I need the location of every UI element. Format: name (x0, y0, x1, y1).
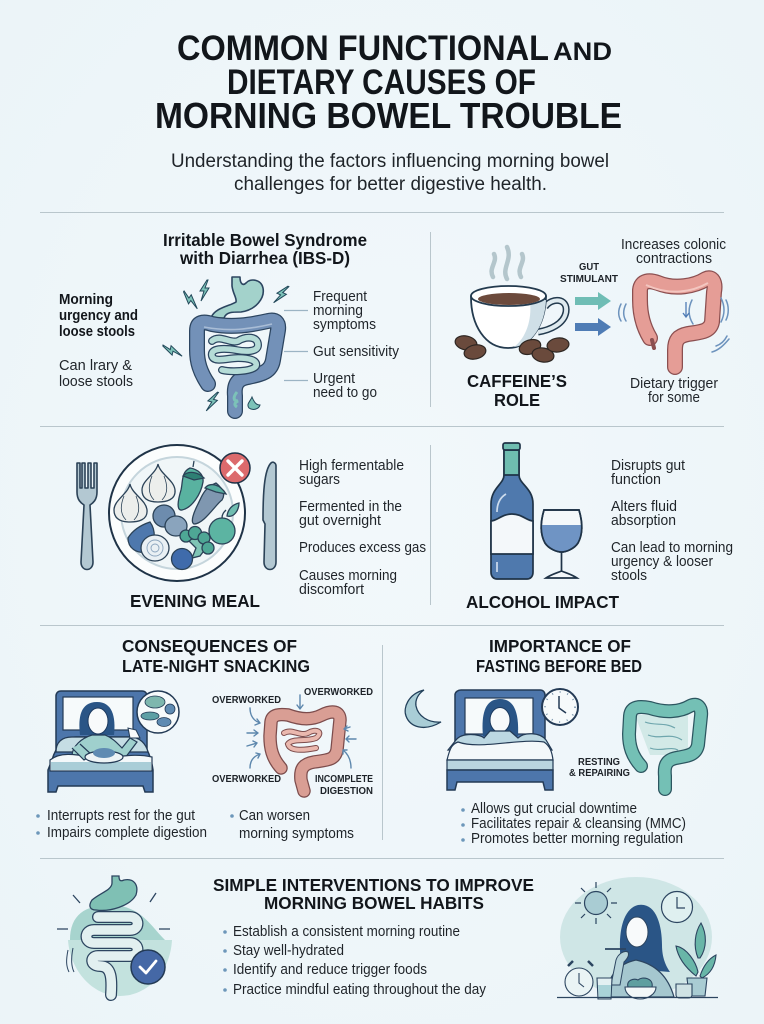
text: morning urgency (59, 292, 138, 390)
text: morning urgency: Morning (59, 292, 113, 308)
icon: snack bubble (137, 691, 179, 733)
text: morning urgency: loose stools (59, 374, 133, 390)
arrow: teal (575, 292, 611, 310)
text: IBS symptoms: Gut sensitivity (313, 344, 400, 360)
text: evening meal points: Fermented in the (299, 499, 402, 515)
heading: alcohol impact: ALCOHOL IMPACT (466, 592, 619, 612)
label: resting and repairing (569, 756, 630, 779)
text: evening meal points: High fermentable (299, 458, 404, 474)
icon: resting colon (629, 705, 701, 789)
subtitle: Understanding the factors influencing morning bowel (171, 151, 609, 172)
labels: overworked: OVERWORKED (304, 686, 373, 698)
labels: overworked: OVERWORKED (212, 694, 281, 706)
text: IBS symptoms: Urgent (313, 371, 355, 387)
heading: IBS-D: Irritable Bowel Syndrome (163, 230, 367, 250)
text: increases contractions (621, 237, 726, 267)
heading: fasting before bed: IMPORTANCE OF (489, 636, 631, 656)
text: intervention bullets: Identify and reduce trigger foods (233, 962, 427, 978)
label: resting and repairing: RESTING (578, 756, 620, 768)
text: fasting bullets: Facilitates repair & cleansing (MMC) (471, 816, 686, 832)
heading: simple interventions: MORNING BOWEL HABITS (264, 893, 484, 913)
text: intervention bullets: Establish a consistent morning routine (233, 924, 460, 940)
text: alcohol points (611, 458, 733, 584)
text: alcohol points: Alters fluid (611, 499, 677, 515)
text: snacking bullets: morning symptoms (239, 826, 354, 842)
labels: overworked: INCOMPLETE (315, 773, 373, 785)
icon: moon (405, 690, 441, 727)
icon: overworked colon (270, 712, 340, 791)
heading: simple interventions (213, 875, 534, 913)
title (155, 29, 622, 136)
panel: simple interventions (57, 875, 718, 999)
label: resting and repairing: & REPAIRING (569, 767, 630, 779)
panel: fasting before bed (405, 636, 701, 847)
text: snacking bullets: Impairs complete digestion (47, 825, 207, 841)
panel: alcohol (466, 443, 733, 612)
text: intervention bullets: Practice mindful eating throughout the day (233, 982, 487, 998)
text: snacking bullets (36, 808, 354, 842)
text: snacking bullets: Interrupts rest for the gut (47, 808, 195, 824)
text: IBS symptoms: symptoms (313, 317, 376, 333)
text: snacking bullets: Can worsen (239, 808, 310, 824)
text: alcohol points: Disrupts gut (611, 458, 685, 474)
subtitle (171, 151, 609, 195)
title: AND (553, 38, 612, 66)
title: MORNING BOWEL TROUBLE (155, 95, 622, 136)
text: IBS symptoms: morning (313, 303, 363, 319)
icon: knife (263, 462, 276, 570)
text: increases contractions: contractions (636, 251, 712, 267)
labels: overworked: DIGESTION (320, 785, 373, 797)
labels: overworked (212, 686, 373, 797)
heading: simple interventions: SIMPLE INTERVENTIONS TO IMPROVE (213, 875, 534, 895)
text: evening meal points: Produces excess gas (299, 540, 426, 556)
heading: fasting before bed (476, 636, 642, 676)
text: intervention bullets: Stay well-hydrated (233, 943, 344, 959)
icon: red x badge (220, 453, 250, 483)
text: gut stimulant (560, 261, 619, 285)
icon: clock (542, 689, 578, 725)
icon: fork (77, 463, 97, 570)
text: morning urgency: urgency and (59, 308, 138, 324)
panel: evening meal (77, 445, 426, 611)
text: fasting bullets: Allows gut crucial downtime (471, 801, 637, 817)
subtitle: challenges for better digestive health. (234, 174, 547, 195)
text: dietary trigger: Dietary trigger (630, 376, 718, 392)
arrow: blue (575, 318, 611, 336)
text: alcohol points: Can lead to morning (611, 540, 733, 556)
text: gut stimulant: STIMULANT (560, 273, 619, 285)
heading: late-night snacking (122, 636, 310, 676)
text: IBS symptoms (284, 289, 400, 401)
text: morning urgency: Can lrary & (59, 358, 132, 374)
icon: coffee cup with beans (454, 247, 570, 364)
icon: wine glass (541, 510, 582, 578)
text: fasting bullets: Promotes better morning regulation (471, 831, 683, 847)
text: increases contractions: Increases colonic (621, 237, 726, 253)
labels: overworked: OVERWORKED (212, 773, 281, 785)
heading: caffeine's role: CAFFEINE’S (467, 371, 567, 391)
icon: pink colon contracting (619, 278, 729, 367)
icon: plate of vegetables (109, 445, 250, 581)
text: alcohol points: stools (611, 568, 647, 584)
icon: woman eating in bed (48, 691, 153, 792)
text: alcohol points: absorption (611, 513, 676, 529)
text: morning urgency: loose stools (59, 324, 135, 340)
heading: evening meal: EVENING MEAL (130, 591, 260, 611)
panel: caffeine (454, 237, 729, 410)
heading: IBS-D: with Diarrhea (IBS-D) (179, 248, 350, 268)
text: evening meal points (299, 458, 426, 598)
heading: late-night snacking: CONSEQUENCES OF (122, 636, 297, 656)
heading: caffeine's role: ROLE (494, 390, 540, 410)
text: evening meal points: discomfort (299, 582, 364, 598)
text: alcohol points: function (611, 472, 661, 488)
heading: fasting before bed: FASTING BEFORE BED (476, 656, 642, 676)
text: IBS symptoms: need to go (313, 385, 377, 401)
icon: digestive tract with lightning bolts (161, 277, 290, 413)
panel: IBS-D (59, 230, 400, 413)
title: DIETARY CAUSES OF (227, 63, 536, 102)
text: gut stimulant: GUT (579, 261, 600, 273)
text: dietary trigger (630, 376, 718, 406)
icon: wine bottle (491, 443, 533, 579)
heading: late-night snacking: LATE-NIGHT SNACKING (122, 656, 310, 676)
text: alcohol points: urgency & looser (611, 554, 713, 570)
arrows: pressure on colon (247, 695, 356, 768)
text: evening meal points: Causes morning (299, 568, 397, 584)
title: COMMON FUNCTIONAL (177, 29, 549, 68)
text: intervention bullets (223, 924, 487, 998)
text: dietary trigger: for some (648, 390, 700, 406)
icon: woman sleeping in bed (447, 690, 553, 790)
text: evening meal points: gut overnight (299, 513, 381, 529)
text: evening meal points: sugars (299, 472, 340, 488)
heading: IBS-D (163, 230, 367, 268)
heading: caffeine's role (467, 371, 567, 410)
text: fasting bullets (461, 801, 686, 847)
panel: late-night snacking (36, 636, 373, 842)
icon: healthy gut with check (57, 876, 172, 996)
icon: woman eating mindfully (557, 877, 718, 999)
text: IBS symptoms: Frequent (313, 289, 367, 305)
